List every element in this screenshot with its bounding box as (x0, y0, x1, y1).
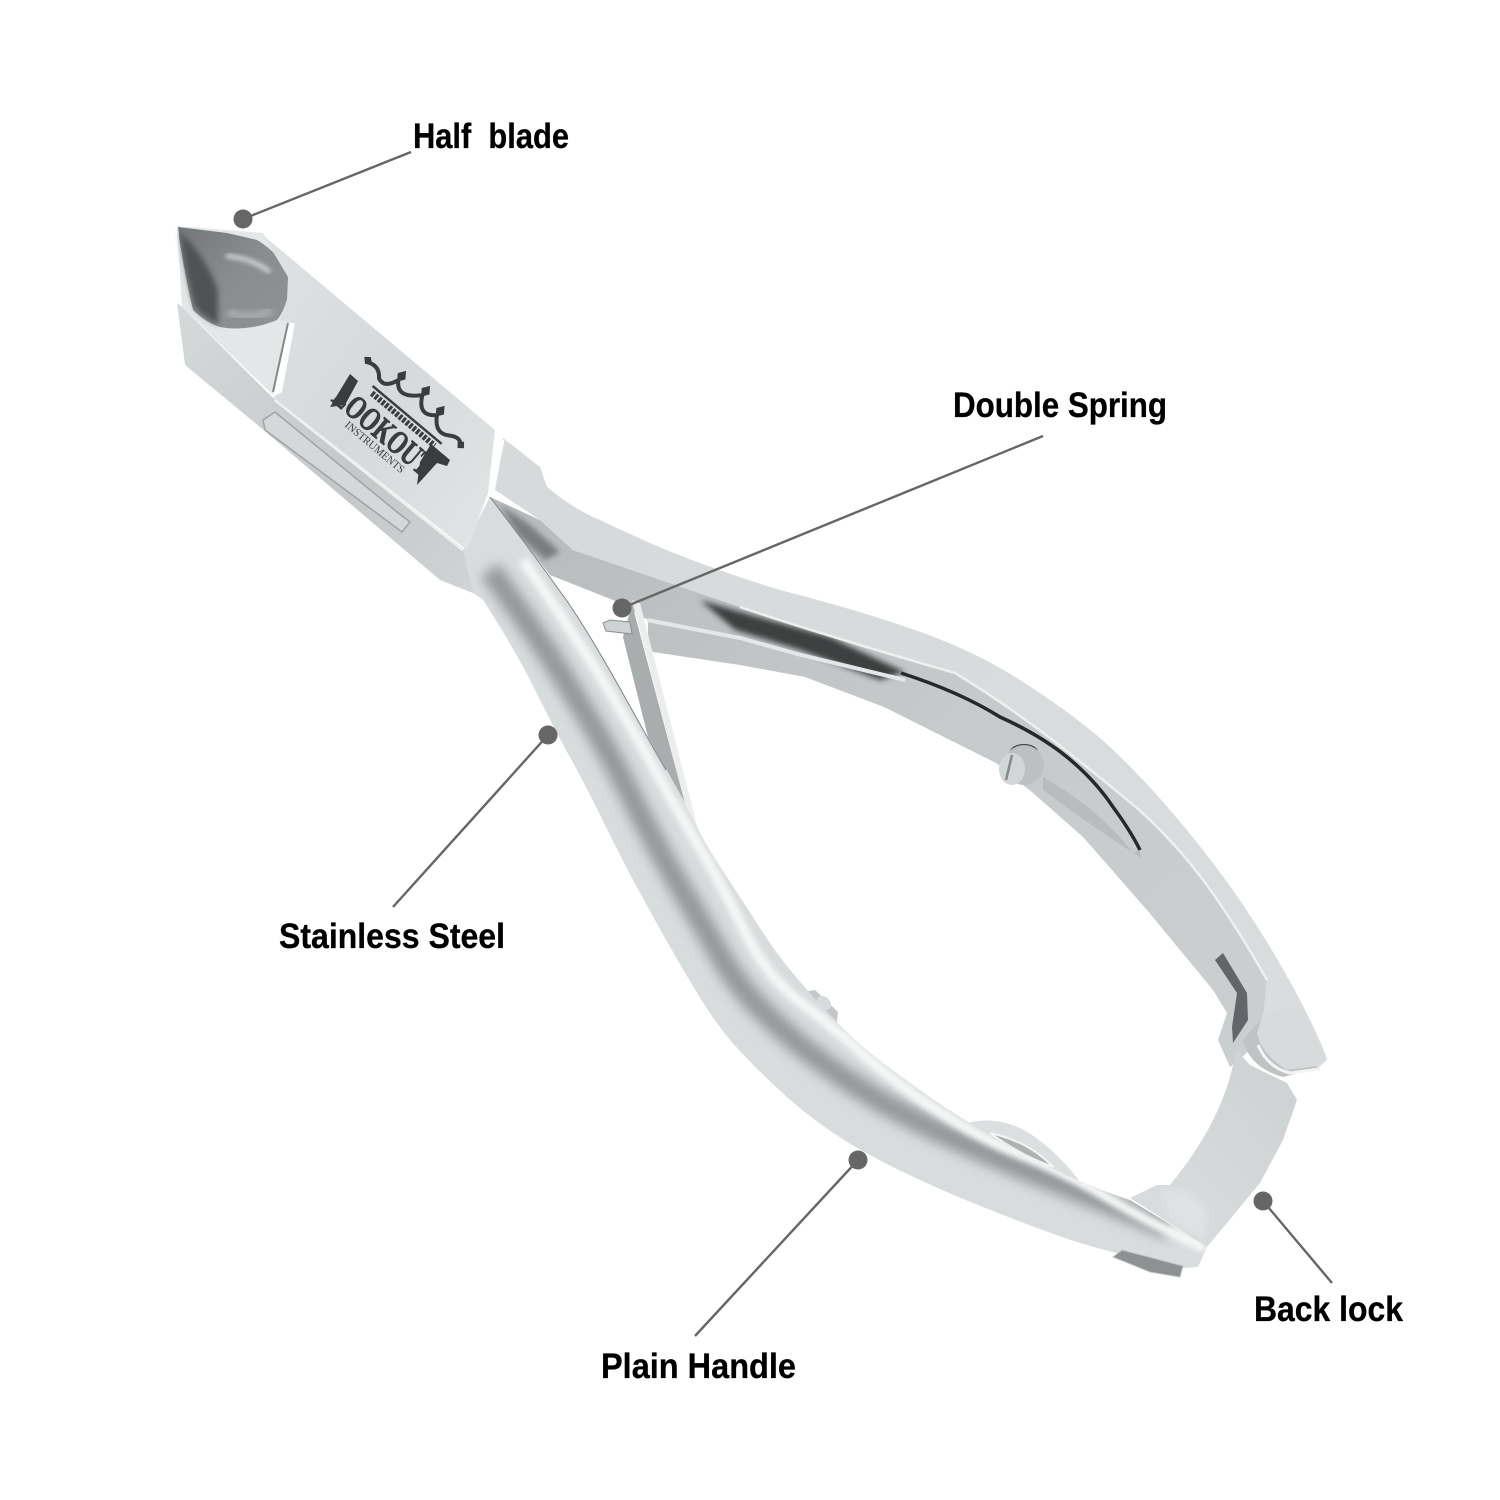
joint face edge highlight (273, 323, 295, 397)
spring screw (999, 744, 1044, 785)
callout: stainless steel (279, 726, 558, 956)
polished joint face (263, 235, 495, 550)
upper lip groove on side wall (275, 400, 463, 550)
callout: half blade (234, 117, 569, 228)
logo subtitle: INSTRUMENTS (342, 419, 407, 476)
rear bolt behind lower handle (803, 990, 838, 1030)
callout: back lock (1254, 1192, 1403, 1329)
lower jaw side wall (177, 303, 480, 593)
logo wordmark: LOOKOUT (325, 379, 440, 484)
upper handle inner highlight line (740, 607, 1267, 980)
spring plate end lens (1043, 777, 1141, 858)
upper handle band (495, 438, 1327, 1072)
nail nipper tool (177, 226, 1327, 1277)
side slot insert (263, 412, 410, 532)
lower jaw top surface (177, 226, 295, 395)
callout: back lock: Back lock (1254, 1290, 1403, 1329)
lock slot (1215, 953, 1248, 1043)
back lock plate (1130, 1050, 1297, 1247)
logo T wedge (417, 444, 450, 485)
callout: plain handle (601, 1150, 868, 1386)
callout: double spring (612, 386, 1167, 618)
dark shadow between spring and handle (500, 505, 1140, 850)
inner spring plate (490, 497, 1267, 1067)
logo crown (350, 342, 481, 461)
triangle spring (603, 600, 700, 837)
back bolt hump on lower handle (960, 1121, 1080, 1182)
callout: half blade: Half blade (413, 117, 569, 156)
callout: double spring: Double Spring (953, 386, 1167, 425)
brand logo (320, 342, 481, 496)
callout: plain handle: Plain Handle (601, 1347, 796, 1386)
spring plate top edge (647, 620, 905, 680)
handle pivot screw (1113, 1250, 1183, 1277)
cutting cavity (178, 227, 289, 328)
callout: stainless steel: Stainless Steel (279, 917, 505, 956)
lower handle (463, 497, 1207, 1268)
logo L wedge (330, 374, 358, 407)
lever cap at back lock (1243, 1005, 1326, 1077)
neck block highlight (493, 440, 503, 490)
